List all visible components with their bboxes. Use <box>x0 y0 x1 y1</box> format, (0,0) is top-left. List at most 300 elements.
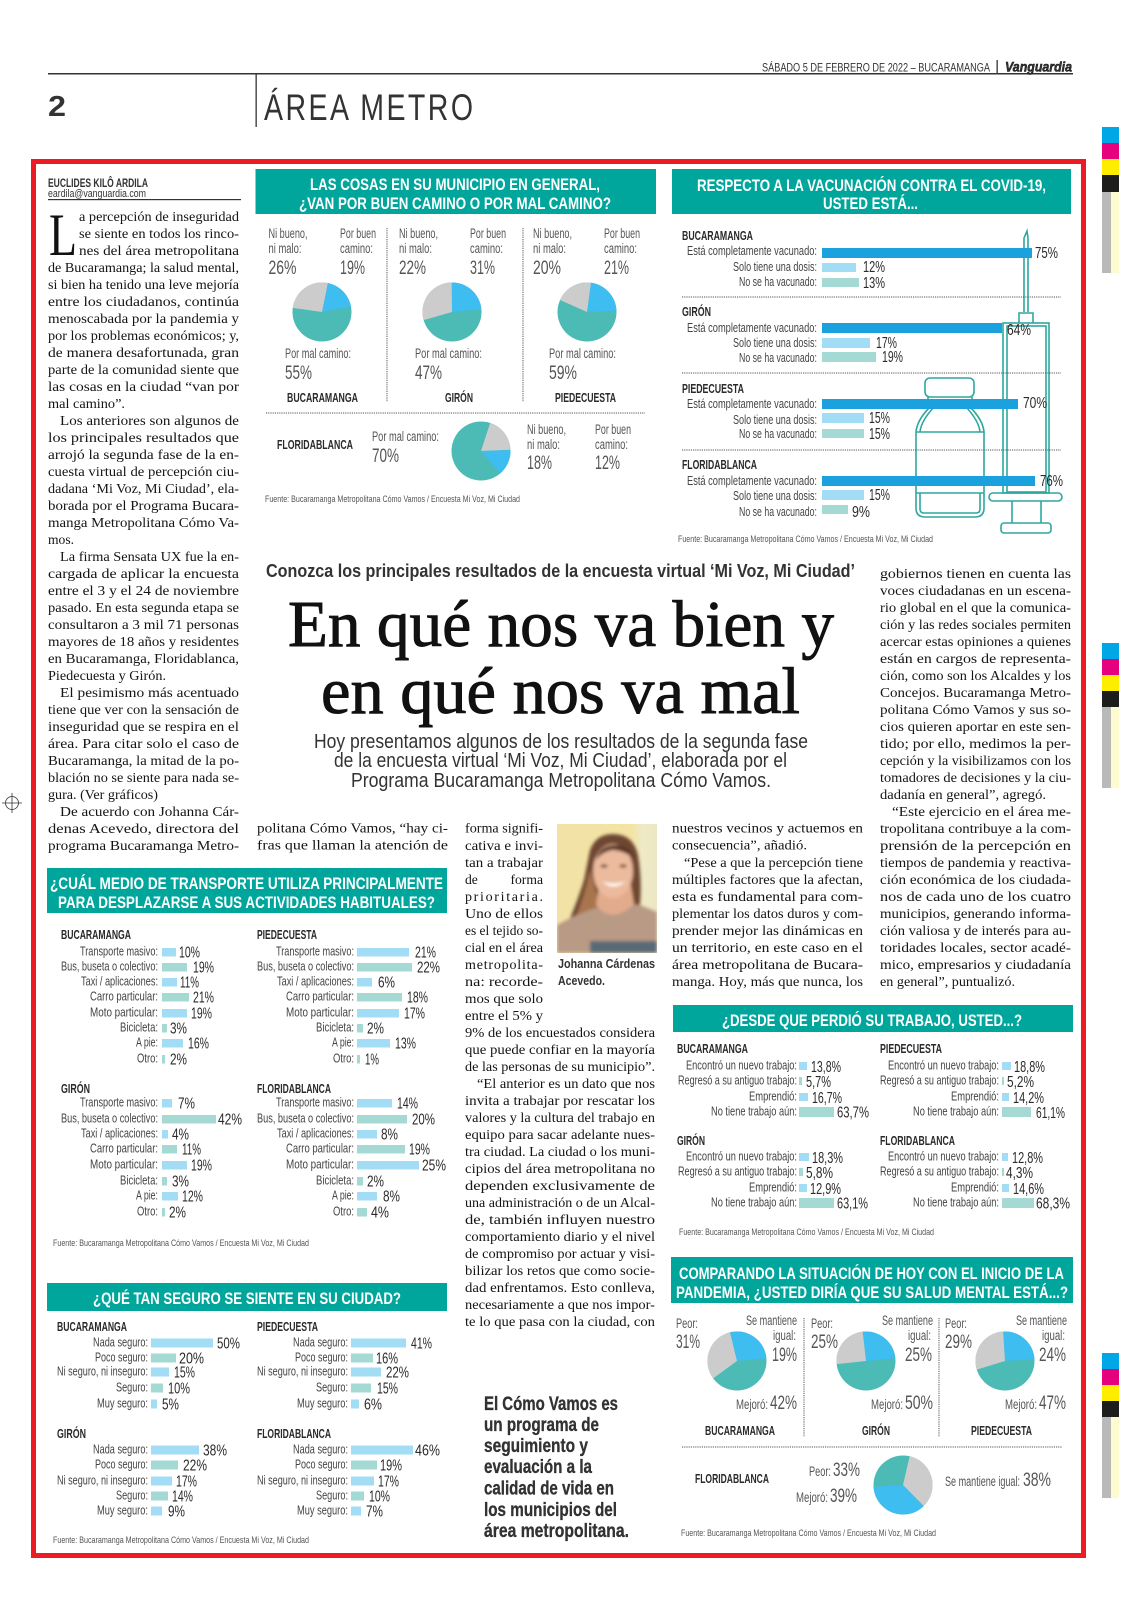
chart: Bucaramanga pie: camino: <box>340 241 373 256</box>
article column 4: “Pese a que la percepción tiene <box>684 856 863 871</box>
chart: Girón pie: Por mal camino: <box>415 346 482 361</box>
article column 1: a percepción de inseguridad <box>79 210 239 225</box>
article column 5: rio global en el que la comunica- <box>880 601 1071 616</box>
article column 3: “El anterior es un dato que nos <box>477 1077 655 1092</box>
main title: En qué nos va bien y <box>288 588 834 661</box>
chart: salud Girón pie <box>811 1313 933 1438</box>
chart: transporte Floridablanca: Bus, buseta o colectivo: <box>257 1110 354 1126</box>
chart: transporte Piedecuesta: Carro particular: <box>286 988 354 1004</box>
chart: vacunación Bucaramanga: Solo tiene una dosis: <box>733 259 817 274</box>
chart: transporte Bucaramanga: Bicicleta: <box>120 1020 158 1034</box>
source note: Fuente: Bucaramanga Metropolitana Cómo Vamos / Encuesta Mi Voz, Mi Ciudad <box>681 1528 936 1539</box>
chart: vacunación Piedecuesta: No se ha vacunado: <box>739 426 817 441</box>
source note: Fuente: Bucaramanga Metropolitana Cómo Vamos / Encuesta Mi Voz, Mi Ciudad <box>679 1227 934 1238</box>
chart: transporte Floridablanca: Moto particular: <box>286 1156 354 1172</box>
article column 1: De acuerdo con Johanna Cár- <box>60 805 239 820</box>
source note: Fuente: Bucaramanga Metropolitana Cómo Vamos / Encuesta Mi Voz, Mi Ciudad <box>265 494 520 505</box>
article column 3: tan a trabajar <box>465 856 543 871</box>
article column 4: esta es fundamental para com- <box>672 890 863 905</box>
article column 3: forma signifi- <box>465 822 543 836</box>
chart: salud Bucaramanga pie: BUCARAMANGA <box>705 1423 775 1438</box>
article column 1: Bucaramanga, la mitad de la po- <box>48 754 239 769</box>
article column 1: El pesimismo más acentuado <box>60 686 239 701</box>
article column 3 <box>465 822 656 1330</box>
chart: seguridad Floridablanca: Poco seguro: <box>295 1456 348 1472</box>
chart: transporte Girón: Taxi / aplicaciones: <box>81 1126 158 1140</box>
chart: vacunación Piedecuesta: Está completamente vacunado: <box>687 396 817 411</box>
article column 3: valores y la cultura del trabajo en <box>465 1111 655 1126</box>
chart: transporte Bucaramanga: Taxi / aplicaciones: <box>81 974 158 988</box>
chart: transporte Girón <box>61 1081 242 1222</box>
chart: transporte Floridablanca: 14% <box>397 1096 418 1112</box>
article column 4: prender mejor las dinámicas en <box>672 924 863 939</box>
chart: transporte Floridablanca: Bicicleta: <box>316 1172 354 1188</box>
chart: transporte Bucaramanga: 2% <box>170 1052 187 1068</box>
chart: transporte Bucaramanga: A pie: <box>136 1034 158 1050</box>
chart: transporte Bucaramanga: 19% <box>193 960 214 976</box>
heading: salud mental <box>671 1257 1073 1303</box>
chart: transporte Piedecuesta: 1% <box>365 1052 379 1068</box>
page header: SÁBADO 5 DE FEBRERO DE 2022 – BUCARAMANGA <box>762 62 990 74</box>
chart: vacunación Floridablanca: No se ha vacunado: <box>739 504 817 519</box>
chart: trabajo Bucaramanga: 16,7% <box>812 1090 842 1107</box>
chart: trabajo Piedecuesta: Encontró un nuevo trabajo: <box>888 1058 999 1072</box>
chart: transporte Floridablanca: 4% <box>371 1204 389 1222</box>
chart: salud Floridablanca pie: FLORIDABLANCA <box>695 1471 769 1486</box>
chart: salud Girón pie: Mejoró: <box>871 1397 903 1412</box>
heading: municipio <box>256 169 656 214</box>
article column 1: las cosas en la ciudad “van por <box>48 380 239 395</box>
chart: Bucaramanga pie: 19% <box>340 258 365 279</box>
callout: Cómo Vamos: calidad de vida en <box>484 1478 614 1500</box>
chart: trabajo Floridablanca: Encontró un nuevo trabajo: <box>888 1148 999 1164</box>
chart: vacunación Girón: 19% <box>882 349 903 366</box>
article column 3: tra ciudad. La ciudad o los muni- <box>465 1145 655 1160</box>
heading: vacunación <box>672 169 1071 214</box>
article column 5: municipios, generando informa- <box>880 907 1071 922</box>
article column 5: tiempos de pandemia y reactiva- <box>880 856 1071 871</box>
chart: transporte Girón: 42% <box>218 1112 242 1128</box>
chart: trabajo Floridablanca: 4,3% <box>1006 1165 1033 1182</box>
chart: seguridad Piedecuesta: Poco seguro: <box>295 1350 348 1364</box>
chart: salud Floridablanca pie: Mejoró: <box>796 1490 828 1505</box>
article column 1: en Bucaramanga, Floridablanca, <box>48 652 239 667</box>
article column 3: equipo para sacar adelante nues- <box>465 1128 655 1143</box>
chart: salud Girón pie: 25% <box>811 1332 838 1353</box>
icon: vial <box>916 378 984 517</box>
chart: transporte Piedecuesta: PIEDECUESTA <box>257 927 317 942</box>
chart: vacunación Bucaramanga: Está completamente vacunado: <box>687 243 817 258</box>
chart: trabajo Bucaramanga: 63,7% <box>837 1104 869 1122</box>
chart: transporte Floridablanca: 2% <box>367 1174 384 1190</box>
chart: Piedecuesta pie: Por mal camino: <box>549 346 616 361</box>
chart: Floridablanca pie: FLORIDABLANCA <box>277 437 353 452</box>
panel: vacunación <box>672 169 1071 545</box>
chart: vacunación Piedecuesta: 15% <box>869 410 890 427</box>
chart: seguridad Floridablanca: 10% <box>369 1488 390 1506</box>
byline: EUCLIDES KILÔ ARDILA <box>48 177 148 190</box>
article column 5: “Este ejercicio en el área me- <box>892 805 1071 820</box>
chart: trabajo Bucaramanga: BUCARAMANGA <box>677 1041 748 1056</box>
chart: vacunación Piedecuesta: 15% <box>869 426 890 443</box>
callout: Cómo Vamos: área metropolitana. <box>484 1521 629 1542</box>
article column 1: nes del área metropolitana <box>79 244 240 259</box>
chart: vacunación Girón: 64% <box>1007 322 1031 339</box>
chart: Bucaramanga pie: 26% <box>268 258 297 279</box>
article column 3: invita a trabajar por rescatar los <box>465 1094 655 1109</box>
chart: transporte Piedecuesta: 2% <box>367 1020 384 1038</box>
page header: 2 <box>48 91 66 123</box>
chart: transporte Piedecuesta: 18% <box>407 990 428 1006</box>
chart: Piedecuesta pie: camino: <box>604 241 637 256</box>
article column 3: de forma <box>465 873 544 888</box>
heading: trabajo: ¿DESDE QUE PERDIÓ SU TRABAJO, USTED...? <box>722 1011 1022 1030</box>
chart: salud Piedecuesta pie: 47% <box>1039 1393 1066 1414</box>
chart: trabajo Floridablanca: No tiene trabajo aún: <box>913 1194 999 1210</box>
chart: salud Piedecuesta pie: Mejoró: <box>1005 1397 1037 1412</box>
chart: transporte Floridablanca: FLORIDABLANCA <box>257 1081 331 1096</box>
chart: Floridablanca pie: Por buen <box>595 422 631 437</box>
chart: transporte Bucaramanga: Moto particular: <box>90 1004 158 1020</box>
chart: transporte Girón: GIRÓN <box>61 1081 90 1096</box>
chart: vacunación Bucaramanga: 13% <box>863 275 885 292</box>
article column 3: de, también influyen nuestro <box>465 1213 655 1228</box>
chart: vacunación Bucaramanga: 12% <box>863 259 885 276</box>
article column 1: blación no se siente para nada se- <box>48 771 239 786</box>
chart: salud Floridablanca pie: 39% <box>830 1486 857 1507</box>
chart: transporte Floridablanca: 8% <box>381 1126 398 1144</box>
chart: Piedecuesta pie: 20% <box>533 258 561 279</box>
article column 1: La firma Sensata UX fue la en- <box>60 550 239 565</box>
chart: trabajo Girón: 18,3% <box>812 1150 843 1167</box>
article column 5: voces ciudadanas en un escena- <box>880 584 1071 599</box>
chart: seguridad Floridablanca <box>257 1426 440 1520</box>
chart: transporte Piedecuesta: 21% <box>415 944 436 962</box>
chart: transporte Floridablanca: Carro particular: <box>286 1140 354 1156</box>
chart: vacunación Floridablanca: 15% <box>869 487 890 504</box>
photo: Johanna Cárdenas <box>557 824 657 953</box>
chart: seguridad Floridablanca: 19% <box>380 1458 402 1474</box>
photo caption: Johanna Cárdenas <box>558 957 655 971</box>
heading: transporte: PARA DESPLAZARSE A SUS ACTIVIDADES HABITUALES? <box>58 893 435 912</box>
chart: salud Bucaramanga pie: 19% <box>772 1345 797 1366</box>
chart: trabajo Floridablanca: Regresó a su antiguo trabajo: <box>880 1164 999 1178</box>
chart: Floridablanca pie: camino: <box>595 437 628 452</box>
chart: Bucaramanga pie: Por buen <box>340 226 376 241</box>
chart: Piedecuesta pie: 59% <box>549 363 577 384</box>
chart: trabajo Girón: 12,9% <box>810 1181 841 1198</box>
chart: trabajo Bucaramanga <box>677 1041 869 1122</box>
article column 1: área. Para citar solo el caso de <box>48 737 239 752</box>
article column 3: dependen exclusivamente de <box>465 1179 655 1194</box>
article column 1: arrojó la segunda fase de la en- <box>48 448 239 463</box>
article column 4: área metropolitana de Bucara- <box>672 958 863 973</box>
chart: trabajo Floridablanca: 68,3% <box>1036 1196 1070 1212</box>
chart: seguridad Girón: GIRÓN <box>57 1426 86 1441</box>
chart: transporte Bucaramanga: 19% <box>191 1006 212 1022</box>
article column 4 <box>672 822 863 990</box>
chart: trabajo Piedecuesta: 61,1% <box>1036 1105 1065 1122</box>
chart: salud Girón pie: Peor: <box>811 1316 833 1331</box>
article column 4: nuestros vecinos y actuemos en <box>672 822 863 836</box>
article column 5: tropolitana contribuye a la com- <box>880 822 1071 837</box>
chart: transporte Piedecuesta: A pie: <box>332 1034 354 1050</box>
chart: vacunación Bucaramanga: BUCARAMANGA <box>682 228 753 243</box>
chart: transporte Floridablanca <box>257 1081 446 1222</box>
chart: transporte Floridablanca: 20% <box>412 1112 435 1128</box>
chart: Piedecuesta pie <box>533 226 640 405</box>
chart: Floridablanca pie: Por mal camino: <box>372 429 439 444</box>
chart: Floridablanca pie: ni malo: <box>527 437 560 452</box>
article column 1: mal camino”. <box>48 397 125 412</box>
chart: Bucaramanga pie: ni malo: <box>268 241 302 256</box>
chart: transporte Girón: Bicicleta: <box>120 1172 158 1188</box>
article column 1: tiene que ver con la sensación de <box>48 703 239 718</box>
chart: Bucaramanga pie: 55% <box>285 363 312 384</box>
chart: seguridad Bucaramanga: Ni seguro, ni inseguro: <box>57 1364 148 1378</box>
article column 5: están en cargos de representa- <box>880 652 1071 667</box>
article column 1: programa Bucaramanga Metro- <box>48 839 239 854</box>
chart: salud Piedecuesta pie: igual: <box>1042 1328 1065 1343</box>
article column 1: gura. (Ver gráficos) <box>48 788 158 803</box>
chart: seguridad Piedecuesta: 41% <box>411 1336 432 1352</box>
article column 5: tomadores de decisiones y la ciu- <box>880 771 1071 786</box>
icon: syringe <box>989 231 1062 533</box>
chart: vacunación Floridablanca: 9% <box>852 504 870 521</box>
chart: seguridad Piedecuesta: 15% <box>377 1380 398 1398</box>
chart: transporte Girón: 3% <box>172 1174 189 1190</box>
chart: Floridablanca pie: 70% <box>372 446 399 467</box>
article column 2: fras que llaman la atención de <box>257 838 448 854</box>
chart: seguridad Floridablanca: 7% <box>366 1504 383 1520</box>
article column 5: cios quieren aportar en este sen- <box>880 720 1071 735</box>
chart: seguridad Floridablanca: Seguro: <box>316 1488 348 1502</box>
chart: trabajo Piedecuesta: PIEDECUESTA <box>880 1041 942 1056</box>
chart: trabajo Floridablanca: 12,8% <box>1012 1150 1043 1167</box>
chart: trabajo Bucaramanga: Regresó a su antiguo trabajo: <box>678 1072 797 1088</box>
article column 1: si bien ha tenido una leve mejoría <box>48 278 240 293</box>
article column 5: ción valiosa y de interés para au- <box>880 924 1071 939</box>
chart: salud Girón pie: 50% <box>905 1393 933 1414</box>
chart: vacunación Floridablanca: 76% <box>1040 473 1063 490</box>
article column 3: necesariamente a que nos impor- <box>465 1298 655 1313</box>
chart: seguridad Piedecuesta: 6% <box>364 1396 382 1414</box>
chart: salud Bucaramanga pie: Se mantiene <box>746 1313 797 1328</box>
chart: transporte Bucaramanga: 11% <box>180 974 199 992</box>
chart: transporte Piedecuesta: 6% <box>378 974 395 992</box>
chart: seguridad Girón: 17% <box>176 1474 197 1490</box>
heading: municipio: LAS COSAS EN SU MUNICIPIO EN GENERAL, <box>310 175 600 194</box>
chart: seguridad Bucaramanga: Nada seguro: <box>93 1334 148 1350</box>
chart: trabajo Piedecuesta: Regresó a su antiguo trabajo: <box>880 1072 999 1088</box>
article column 5: Concejos. Bucaramanga Metro- <box>880 686 1071 701</box>
article column 3: prioritaria. <box>465 890 543 905</box>
article column 5: cepción y la visibilizamos con los <box>880 754 1071 769</box>
chart: trabajo Bucaramanga: No tiene trabajo aún: <box>711 1104 797 1118</box>
article column 5: dadanía en general”, agregó. <box>880 788 1046 803</box>
article column 3: Uno de ellos <box>465 907 543 922</box>
chart: seguridad Girón: 9% <box>168 1504 185 1520</box>
article column 3: mos que solo <box>465 992 543 1007</box>
article column 4: manga. Hoy, más que nunca, los <box>672 975 863 990</box>
registration mark <box>2 793 22 813</box>
chart: transporte Floridablanca: 8% <box>383 1188 400 1206</box>
chart: vacunación Piedecuesta: PIEDECUESTA <box>682 381 744 396</box>
chart: salud Girón pie: GIRÓN <box>862 1423 890 1438</box>
article column 5: ción, como son los Alcaldes y los <box>880 669 1071 684</box>
chart: trabajo Piedecuesta: 14,2% <box>1013 1090 1044 1107</box>
chart: seguridad Bucaramanga: 20% <box>179 1350 204 1368</box>
chart: Piedecuesta pie: PIEDECUESTA <box>555 390 616 405</box>
chart: salud Girón pie: igual: <box>908 1328 931 1343</box>
chart: Piedecuesta pie: 21% <box>604 258 629 279</box>
chart: Piedecuesta pie: Ni bueno, <box>533 226 572 241</box>
panel: municipio camino <box>256 169 656 505</box>
article column 1: borada por el Programa Bucara- <box>48 499 239 514</box>
article column 5: tido; por ello, medimos la per- <box>880 737 1071 752</box>
chart: transporte Piedecuesta: Otro: <box>333 1050 354 1066</box>
chart: transporte Bucaramanga: Bus, buseta o colectivo: <box>61 958 158 974</box>
article column 3: na: recorde- <box>465 975 543 990</box>
article column 1: Piedecuesta y Girón. <box>48 669 166 684</box>
chart: seguridad Piedecuesta <box>257 1319 432 1414</box>
chart: salud Floridablanca pie: Peor: <box>809 1464 831 1479</box>
chart: transporte Bucaramanga <box>61 927 214 1068</box>
callout: Cómo Vamos: un programa de <box>484 1415 599 1436</box>
chart: Bucaramanga pie: Por mal camino: <box>285 346 351 361</box>
chart: transporte Bucaramanga: BUCARAMANGA <box>61 927 131 942</box>
main title: en qué nos va mal <box>321 655 800 728</box>
chart: seguridad Piedecuesta: 22% <box>386 1364 409 1382</box>
article column 3: comportamiento diario y el nivel <box>465 1230 655 1245</box>
chart: transporte Bucaramanga: Carro particular: <box>90 988 158 1004</box>
article column 5: acercar estas opiniones a quienes <box>880 635 1071 650</box>
chart: trabajo Floridablanca: Emprendió: <box>951 1180 999 1194</box>
callout: Cómo Vamos: los municipios del <box>484 1500 617 1521</box>
chart: transporte Floridablanca: Otro: <box>333 1204 354 1218</box>
page header: Vanguardia <box>1005 58 1072 74</box>
chart: seguridad Bucaramanga: 15% <box>174 1364 195 1382</box>
article column 1: parte de la comunidad siente que <box>48 363 239 378</box>
chart: transporte Girón: 12% <box>182 1188 203 1206</box>
chart: vacunación Girón: 17% <box>876 335 897 352</box>
article column 1: por los problemas económicos; y, <box>48 329 239 344</box>
chart: seguridad Floridablanca: 17% <box>378 1474 399 1490</box>
chart: trabajo Floridablanca: 14,6% <box>1013 1181 1044 1198</box>
chart: Piedecuesta pie: ni malo: <box>533 241 566 256</box>
chart: salud Bucaramanga pie <box>676 1313 797 1438</box>
callout: Cómo Vamos <box>484 1394 629 1542</box>
article column 5: nos de cada uno de los cuatro <box>880 890 1071 905</box>
chart: transporte Piedecuesta: Moto particular: <box>286 1004 354 1020</box>
chart: Bucaramanga pie: Ni bueno, <box>268 226 308 241</box>
article column 4: un territorio, en este caso en el <box>672 941 863 956</box>
heading: vacunación: USTED ESTÁ... <box>823 194 918 213</box>
chart: salud Piedecuesta pie: Peor: <box>945 1316 967 1331</box>
chart: vacunación Girón: Solo tiene una dosis: <box>733 335 817 350</box>
article column 5: mico, empresarios y ciudadanía <box>880 958 1072 973</box>
chart: vacunación Girón: GIRÓN <box>682 304 711 319</box>
page header <box>48 58 1073 129</box>
chart: seguridad Piedecuesta: Seguro: <box>316 1380 348 1394</box>
heading: municipio: ¿VAN POR BUEN CAMINO O POR MAL CAMINO? <box>299 194 611 213</box>
chart: seguridad Girón <box>57 1426 227 1520</box>
article column 5: toridades locales, sector acadé- <box>880 941 1071 956</box>
chart: seguridad Girón: Nada seguro: <box>93 1442 148 1456</box>
article column 3: te lo que pasa con la ciudad, con <box>465 1315 655 1330</box>
source note: Fuente: Bucaramanga Metropolitana Cómo Vamos / Encuesta Mi Voz, Mi Ciudad <box>53 1238 309 1249</box>
panel: seguridad <box>47 1283 447 1546</box>
chart: seguridad Floridablanca: Ni seguro, ni inseguro: <box>257 1472 348 1488</box>
chart: transporte Floridablanca: A pie: <box>332 1188 354 1202</box>
chart: trabajo Girón: Encontró un nuevo trabajo: <box>686 1148 797 1164</box>
chart: seguridad Girón: 22% <box>183 1458 207 1474</box>
chart: seguridad Floridablanca: Muy seguro: <box>297 1502 348 1518</box>
chart: seguridad Piedecuesta: 16% <box>376 1350 398 1368</box>
article column 1: cargada de aplicar la encuesta <box>48 567 240 582</box>
chart: vacunación Floridablanca: FLORIDABLANCA <box>682 457 757 472</box>
chart: vacunación Floridablanca <box>682 457 1063 521</box>
chart: transporte Girón: Bus, buseta o colectivo: <box>61 1110 158 1126</box>
chart: seguridad Bucaramanga: BUCARAMANGA <box>57 1319 127 1334</box>
chart: salud Bucaramanga pie: igual: <box>773 1328 796 1343</box>
chart: transporte Floridablanca: Taxi / aplicaciones: <box>277 1126 354 1140</box>
chart: seguridad Girón: Muy seguro: <box>97 1502 148 1518</box>
deck: de la encuesta virtual ‘Mi Voz, Mi Ciudad’, elaborada por el <box>334 750 787 772</box>
chart: seguridad Girón: 14% <box>172 1488 193 1506</box>
chart: trabajo Girón: No tiene trabajo aún: <box>711 1194 797 1210</box>
heading: seguridad: ¿QUÉ TAN SEGURO SE SIENTE EN SU CIUDAD? <box>93 1289 401 1308</box>
chart: trabajo Bucaramanga: 13,8% <box>811 1059 841 1076</box>
article column 3: una administración o de un Alcal- <box>465 1196 655 1211</box>
article column 1: se siente en todos los rinco- <box>79 227 239 242</box>
callout: Cómo Vamos: El Cómo Vamos es <box>484 1394 618 1415</box>
chart: salud Piedecuesta pie: 24% <box>1039 1345 1066 1366</box>
chart: transporte Girón: 11% <box>182 1142 201 1158</box>
chart: Girón pie: GIRÓN <box>445 390 473 405</box>
chart: Girón pie: camino: <box>470 241 503 256</box>
printer colour bars <box>1102 127 1119 1498</box>
byline: eardila@vanguardia.com <box>48 188 146 200</box>
chart: salud Bucaramanga pie: 31% <box>676 1332 700 1353</box>
page header: ÁREA METRO <box>264 87 473 129</box>
chart: Piedecuesta pie: Por buen <box>604 226 640 241</box>
chart: transporte Girón: 19% <box>191 1158 212 1174</box>
chart: Girón pie: 31% <box>470 258 495 279</box>
chart: transporte Girón: Transporte masivo: <box>80 1094 158 1110</box>
chart: transporte Girón: 7% <box>178 1096 195 1112</box>
chart: vacunación Bucaramanga: No se ha vacunado: <box>739 274 817 289</box>
chart: seguridad Bucaramanga: Seguro: <box>116 1380 148 1394</box>
chart: trabajo Piedecuesta: No tiene trabajo aún: <box>913 1104 999 1118</box>
article column 1: menoscabada por la pandemia y <box>48 312 239 327</box>
article column 3: metropolita- <box>465 958 543 973</box>
chart: salud Piedecuesta pie: PIEDECUESTA <box>971 1423 1032 1438</box>
chart: vacunación Bucaramanga: 75% <box>1035 245 1058 262</box>
callout: Cómo Vamos: seguimiento y <box>484 1436 588 1457</box>
panel: trabajo <box>673 1005 1073 1238</box>
article column 1: mayores de 18 años y residentes <box>48 635 239 650</box>
chart: salud Girón pie: Se mantiene <box>882 1313 933 1328</box>
chart: seguridad Piedecuesta: Muy seguro: <box>297 1396 348 1410</box>
article column 1 <box>48 202 240 854</box>
chart: salud Piedecuesta pie: Se mantiene <box>1016 1313 1067 1328</box>
article column 3: cipios del área metropolitana no <box>465 1162 655 1177</box>
article column 1: entre el 3 y el 24 de noviembre <box>48 584 239 599</box>
photo caption <box>558 957 655 988</box>
chart: vacunación Piedecuesta <box>682 381 1047 443</box>
chart: transporte Bucaramanga: 16% <box>188 1036 209 1052</box>
